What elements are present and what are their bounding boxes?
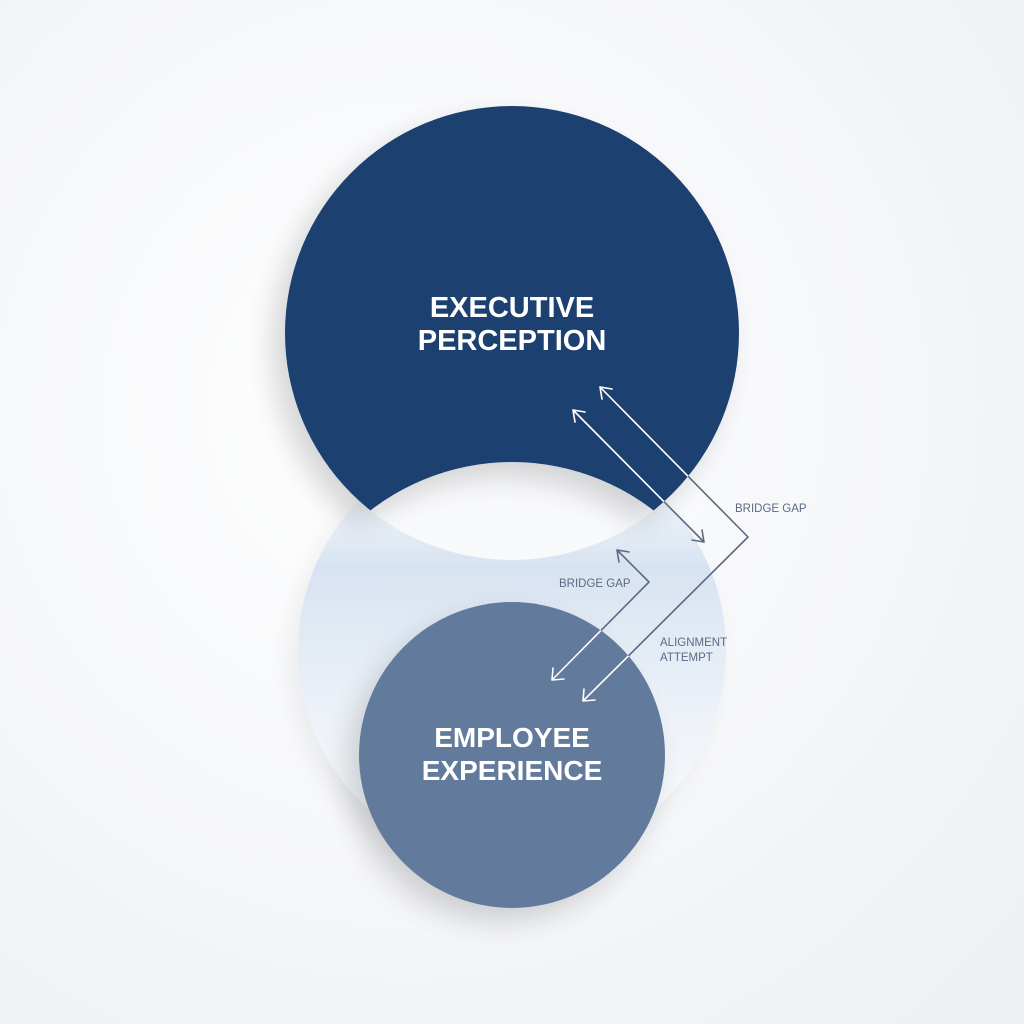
arrows: [552, 387, 748, 701]
circle: executive perception: [285, 106, 739, 560]
circle: employee experience: [359, 602, 665, 908]
cutout white area: [371, 502, 653, 560]
label: alignment attempt: ATTEMPT: [660, 652, 713, 664]
label: alignment attempt: ALIGNMENT: [660, 637, 727, 649]
title: executive perception: PERCEPTION: [418, 325, 606, 357]
title: executive perception: EXECUTIVE: [430, 292, 594, 324]
title: employee experience: EMPLOYEE: [434, 722, 590, 753]
pale background circle: [298, 436, 726, 864]
label: bridge gap left: BRIDGE GAP: [559, 578, 631, 590]
label: bridge gap right: BRIDGE GAP: [735, 503, 807, 515]
title: employee experience: EXPERIENCE: [422, 755, 602, 786]
